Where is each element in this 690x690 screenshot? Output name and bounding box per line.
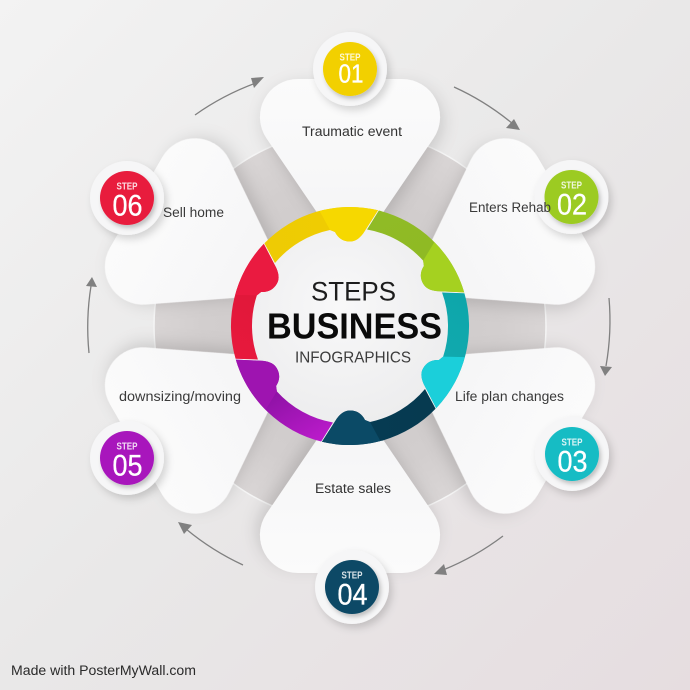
badge: step 1 (313, 32, 387, 106)
central hub circle (250, 226, 450, 426)
arrow: step 3 to step 4 (434, 536, 503, 575)
arrow: step 6 to step 1 (195, 77, 264, 115)
ring segment: navy (322, 389, 436, 445)
badge: step 2 (534, 160, 608, 234)
badge: step 3: STEP (562, 437, 582, 449)
badge: step 4: STEP (342, 570, 362, 582)
ring segment: teal (391, 283, 496, 410)
badge: step 3 (535, 417, 609, 491)
panel: step 5 petal (91, 281, 339, 527)
badge: step 6: 06 (112, 190, 142, 222)
colour ring (204, 192, 496, 460)
panel: step 1 petal (260, 79, 440, 261)
title: STEPS: STEPS (311, 276, 396, 306)
ring segment: red (204, 242, 309, 369)
badge: step 6: STEP (116, 181, 138, 193)
title: BUSINESS: BUSINESS (267, 306, 442, 346)
badge: step 3: 03 (558, 446, 588, 478)
panel: step 6 petal (91, 125, 339, 371)
badge: step 5 (90, 421, 164, 495)
label: Estate sales: Estate sales (315, 481, 391, 496)
badge: step 2: STEP (561, 180, 582, 192)
arrow: step 2 to step 3 (600, 298, 612, 376)
badge: step 5: STEP (116, 441, 138, 453)
badge: step 1: STEP (340, 52, 360, 64)
badge: step 4 (315, 550, 389, 624)
label: Sell home: Sell home (163, 205, 224, 220)
arrow: step 4 to step 5 (178, 522, 243, 565)
label: downsizing/moving: downsizing/moving (119, 389, 241, 404)
panel: step 4 petal (260, 391, 440, 573)
grey backing disc (154, 130, 546, 522)
badge: step 5: 05 (112, 450, 142, 482)
label: Traumatic event: Traumatic event (302, 124, 402, 139)
arrow: step 5 to step 6 (86, 277, 97, 353)
label: Life plan changes: Life plan changes (455, 389, 564, 404)
title: INFOGRAPHICS: INFOGRAPHICS (295, 350, 411, 366)
ring segment: yellow (264, 207, 378, 263)
arrow: step 1 to step 2 (454, 87, 520, 130)
panel: step 3 petal (361, 281, 609, 527)
ring segment: purple (233, 333, 338, 460)
badge: step 2: 02 (557, 188, 587, 222)
badge: step 6 (90, 161, 164, 235)
ring segment: green (362, 192, 467, 319)
label: Enters Rehab: Enters Rehab (469, 200, 551, 215)
badge: step 1: 01 (338, 61, 364, 89)
title block (267, 276, 442, 366)
panel: step 2 petal (361, 125, 609, 371)
badge: step 4: 04 (338, 578, 368, 612)
footer credit: Made with PosterMyWall.com (11, 663, 196, 678)
